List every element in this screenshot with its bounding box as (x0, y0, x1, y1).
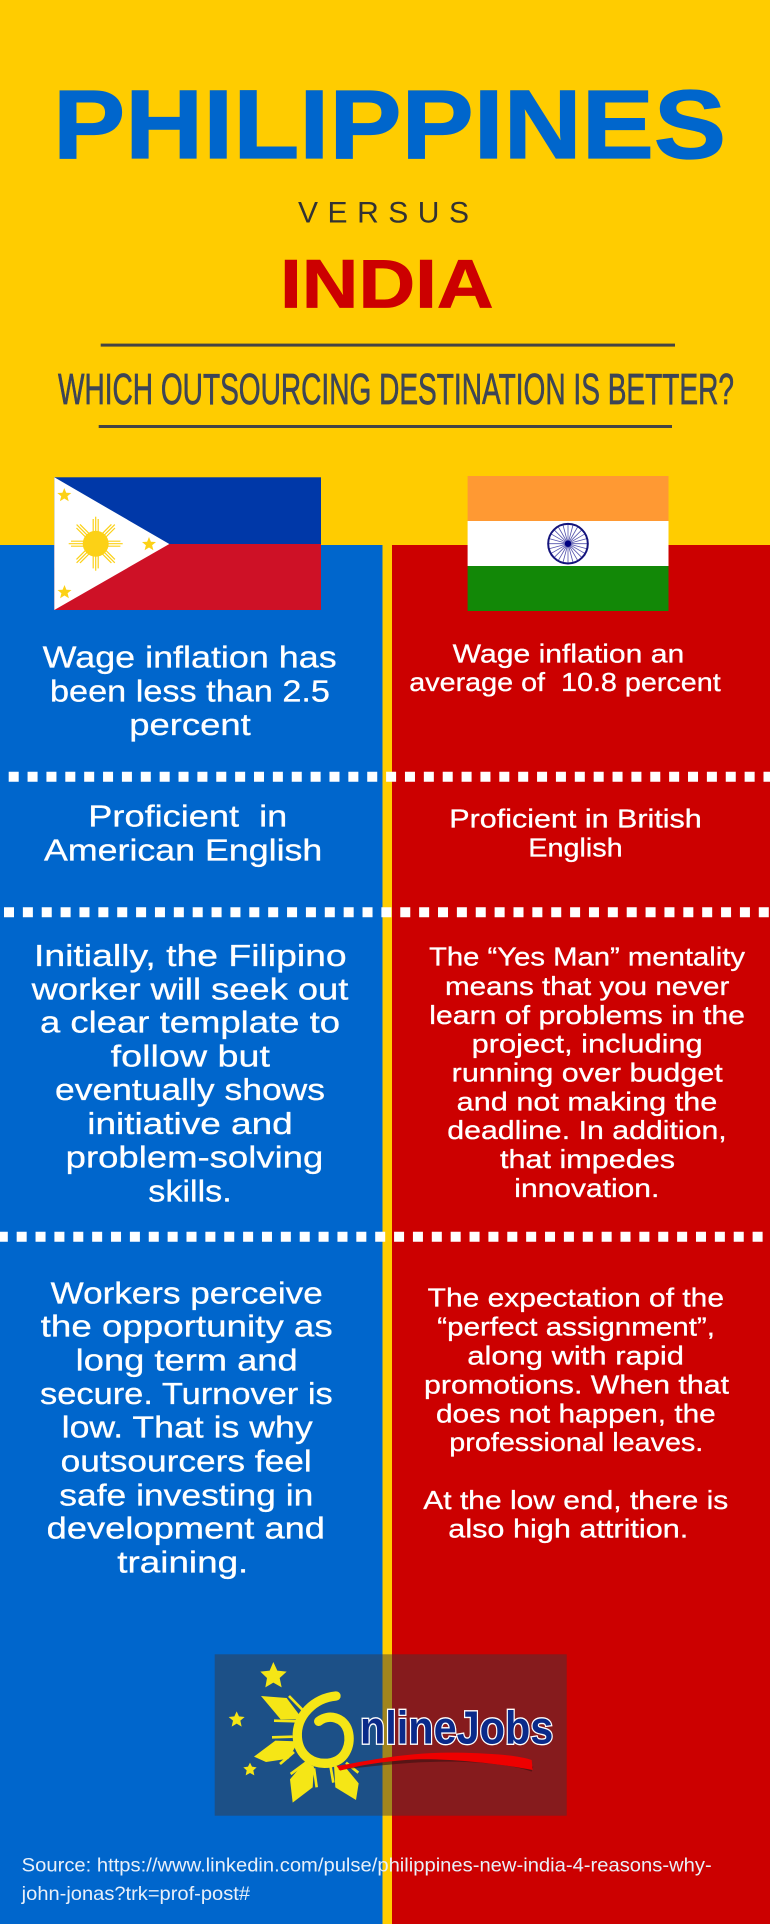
logo: OnlineJobs: nlineJobs (360, 1701, 553, 1753)
text: Philippines wage inflation: Wage inflation has (43, 641, 337, 675)
text: Philippines retention: outsourcers feel (61, 1445, 312, 1479)
text: India English proficiency: English (528, 833, 623, 863)
text: Philippines English proficiency: American English (44, 834, 322, 868)
text: India attrition: along with rapid (467, 1340, 684, 1370)
text: India yes man mentality: learn of problems in the (429, 1000, 745, 1030)
text: Philippines retention: low. That is why (62, 1411, 314, 1445)
text: Philippines English proficiency (44, 800, 322, 868)
logo: OnlineJobs (215, 1654, 567, 1816)
text: Philippines retention: long term and (76, 1343, 298, 1377)
text: India English proficiency (449, 804, 702, 863)
text: Philippines initiative: eventually shows (55, 1073, 325, 1107)
icon: Indian flag (468, 476, 668, 611)
text: India yes man mentality: deadline. In addition, (447, 1115, 727, 1145)
text: Philippines retention: Workers perceive (51, 1276, 323, 1310)
text: India attrition: promotions. When that (424, 1369, 730, 1399)
text: Philippines initiative: Initially, the Filipino (34, 939, 347, 973)
text: Philippines wage inflation: percent (129, 708, 251, 742)
text: India attrition: professional leaves. (449, 1427, 703, 1457)
text: India wage inflation (409, 638, 722, 697)
text: Philippines initiative: skills. (148, 1175, 232, 1209)
text: India yes man mentality: that impedes (500, 1144, 675, 1174)
text: Philippines initiative: initiative and (87, 1107, 293, 1141)
text: Philippines retention: secure. Turnover is (40, 1377, 333, 1411)
text: India wage inflation: average of 10.8 percent (409, 667, 722, 697)
text: India yes man mentality: means that you never (445, 971, 730, 1001)
text: India attrition: does not happen, the (436, 1398, 716, 1428)
text: Philippines initiative: follow but (111, 1039, 271, 1073)
text: Philippines retention: training. (117, 1545, 248, 1579)
text: Philippines retention: safe investing in (59, 1478, 313, 1512)
text: India attrition (423, 1283, 730, 1544)
text: source citation: Source: https://www.linkedin.com/pulse/philippines-new-india-4-reasons-why- (22, 1855, 712, 1877)
text: India attrition: At the low end, there is (423, 1485, 728, 1515)
text: Philippines initiative: worker will seek out (31, 972, 349, 1006)
text: India attrition: The expectation of the (428, 1283, 724, 1313)
text: Philippines initiative: a clear template to (40, 1006, 340, 1040)
text: Philippines retention: the opportunity as (41, 1310, 333, 1344)
text: India yes man mentality: innovation. (514, 1173, 659, 1203)
panel: Philippines column background (0, 545, 382, 1924)
text: India attrition: also high attrition. (448, 1514, 688, 1544)
text: Philippines English proficiency: Proficient in (88, 800, 287, 834)
text: Philippines retention: development and (47, 1512, 325, 1546)
text: India yes man mentality: project, including (472, 1029, 703, 1059)
title: Philippines: PHILIPPINES (53, 70, 726, 179)
text: India attrition: “perfect assignment”, (437, 1312, 715, 1342)
panel: India column background (392, 545, 770, 1924)
text: Philippines initiative (31, 939, 349, 1209)
text: India yes man mentality: The “Yes Man” mentality (429, 942, 745, 972)
text: Philippines initiative: problem-solving (66, 1141, 323, 1175)
text: source citation: john-jonas?trk=prof-post# (21, 1883, 250, 1905)
text: India English proficiency: Proficient in British (449, 804, 702, 834)
text: India yes man mentality (429, 942, 745, 1203)
text: source citation (21, 1855, 712, 1905)
text: Philippines wage inflation: been less than 2.5 (50, 675, 330, 709)
subtitle: versus: VERSUS (298, 196, 469, 230)
text: India wage inflation: Wage inflation an (453, 638, 684, 668)
text: India yes man mentality: and not making the (457, 1086, 717, 1116)
icon: Philippine flag (54, 477, 321, 610)
text: Philippines retention (40, 1276, 333, 1579)
text: Philippines wage inflation (43, 641, 337, 742)
text: India yes man mentality: running over budget (452, 1057, 724, 1087)
title: India: INDIA (280, 246, 494, 322)
